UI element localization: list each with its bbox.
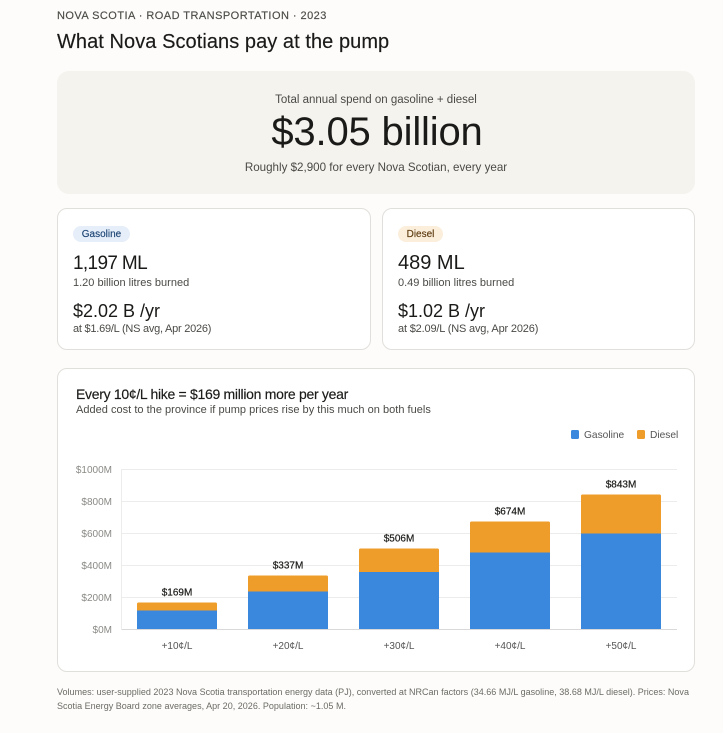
panel: total spend hero <box>57 71 695 194</box>
source footnote: Scotia Energy Board zone averages, Apr 20, 2026. Population: ~1.05 M. <box>57 700 346 710</box>
gasoline price note: at $1.69/L (NS avg, Apr 2026) <box>73 323 211 335</box>
bar: +10 cents: $169M <box>162 588 192 598</box>
chart subheading: Added cost to the province if pump prices rise by this much on both fuels <box>76 404 431 416</box>
hero label: Total annual spend on gasoline + diesel <box>275 94 477 106</box>
bar: +20 cents: +20¢/L <box>273 641 304 652</box>
diesel price note: at $2.09/L (NS avg, Apr 2026) <box>398 323 538 335</box>
bar: +30 cents: +30¢/L <box>384 641 415 652</box>
source footnote: Volumes: user-supplied 2023 Nova Scotia transportation energy data (PJ), converted at NRCan factors (34.66 MJ/L gasoline, 38.68 MJ/L diesel). Prices: Nova <box>57 687 689 697</box>
eyebrow: NOVA SCOTIA · ROAD TRANSPORTATION · 2023 <box>57 10 327 22</box>
y axis labels: $400M <box>81 561 112 572</box>
gasoline volume: 1,197 ML <box>73 252 147 274</box>
bar: +40 cents: +40¢/L <box>495 641 526 652</box>
hero value: $3.05 billion <box>271 110 483 154</box>
bar: +40 cents: $674M <box>495 506 525 518</box>
bar: +30 cents <box>359 534 439 652</box>
title: What Nova Scotians pay at the pump <box>57 31 389 53</box>
source footnote <box>57 687 689 711</box>
y axis labels: $0M <box>93 625 112 636</box>
legend: Gasoline <box>584 430 625 441</box>
bar: +20 cents <box>248 560 328 652</box>
diesel pill: Diesel <box>407 229 434 240</box>
hero subtext: Roughly $2,900 for every Nova Scotian, every year <box>245 161 507 174</box>
bar: +10 cents: +10¢/L <box>162 641 193 652</box>
legend <box>571 430 678 441</box>
panel: gasoline card <box>57 208 371 350</box>
y axis labels: $1000M <box>76 465 112 476</box>
diesel litres: 0.49 billion litres burned <box>398 277 514 289</box>
y axis labels: $600M <box>81 529 112 540</box>
legend: Diesel <box>650 430 678 441</box>
bar: +50 cents <box>581 480 661 652</box>
gasoline litres: 1.20 billion litres burned <box>73 277 189 289</box>
diesel volume: 489 ML <box>398 252 465 274</box>
diesel pill <box>398 226 443 242</box>
bar: +50 cents: +50¢/L <box>606 641 637 652</box>
gasoline pill <box>73 226 130 242</box>
bar: +20 cents: $337M <box>273 560 303 572</box>
y axis labels: $200M <box>81 593 112 604</box>
bar: +30 cents: $506M <box>384 534 414 544</box>
panel: diesel card <box>382 208 695 350</box>
chart heading: Every 10¢/L hike = $169 million more per year <box>76 386 348 402</box>
bar: +40 cents <box>470 506 550 652</box>
y axis labels: $800M <box>81 497 112 508</box>
gasoline cost: $2.02 B /yr <box>73 301 160 321</box>
bar: +50 cents: $843M <box>606 480 636 490</box>
bar: +10 cents <box>137 588 217 652</box>
diesel cost: $1.02 B /yr <box>398 301 485 321</box>
gasoline pill: Gasoline <box>82 229 121 240</box>
y axis labels <box>76 465 112 636</box>
panel: price hike chart <box>57 368 695 672</box>
